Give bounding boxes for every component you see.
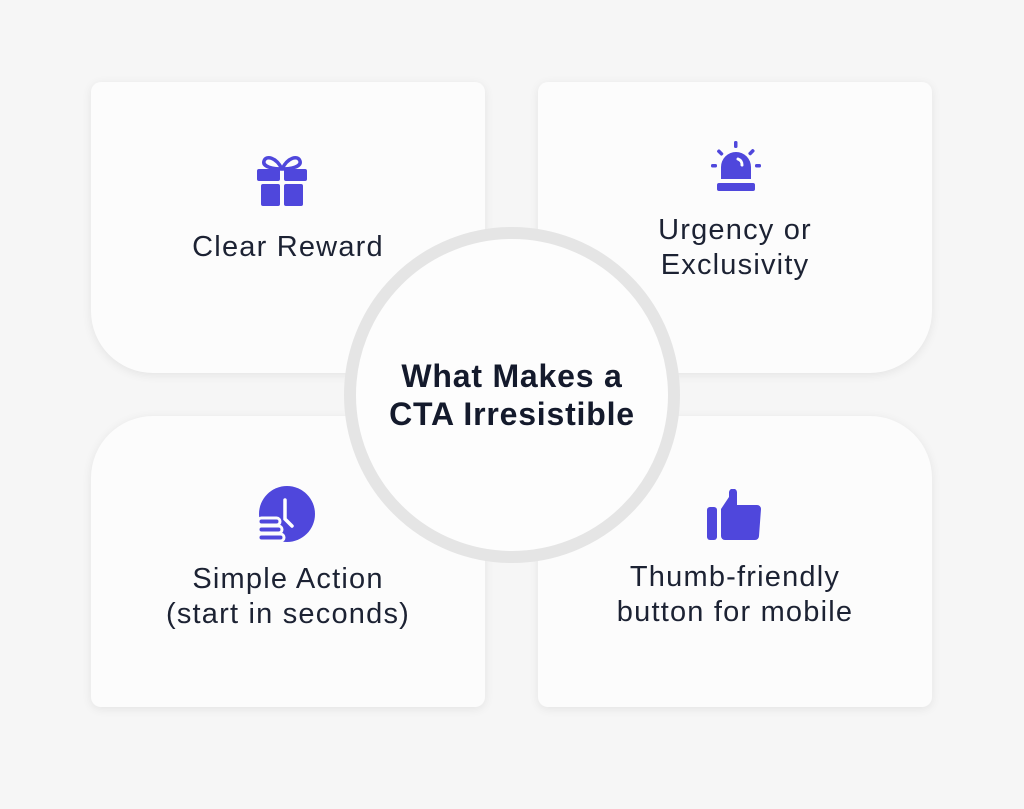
icon: siren: [711, 141, 761, 191]
panel: simple action: [91, 416, 485, 707]
title: CTA Irresistible: [389, 396, 635, 432]
text: clear reward: Clear Reward: [192, 231, 384, 263]
panel: clear reward: [91, 82, 485, 373]
icon: thumbs up: [707, 489, 761, 540]
text: urgency: Urgency or: [658, 214, 812, 246]
text: thumb friendly: [617, 561, 853, 628]
title: What Makes a: [401, 358, 623, 394]
text: simple action: [166, 563, 410, 630]
text: thumb friendly: Thumb-friendly: [630, 561, 840, 593]
title: [389, 358, 635, 432]
panel: urgency: [538, 82, 932, 373]
text: thumb friendly: button for mobile: [617, 596, 853, 628]
center circle title: [344, 227, 680, 563]
text: urgency: [658, 214, 812, 281]
icon: clock: [259, 486, 315, 542]
text: urgency: Exclusivity: [661, 249, 809, 281]
panel: thumb friendly: [538, 416, 932, 707]
text: simple action: Simple Action: [192, 563, 384, 595]
icon: gift: [257, 156, 307, 206]
text: simple action: (start in seconds): [166, 598, 410, 630]
